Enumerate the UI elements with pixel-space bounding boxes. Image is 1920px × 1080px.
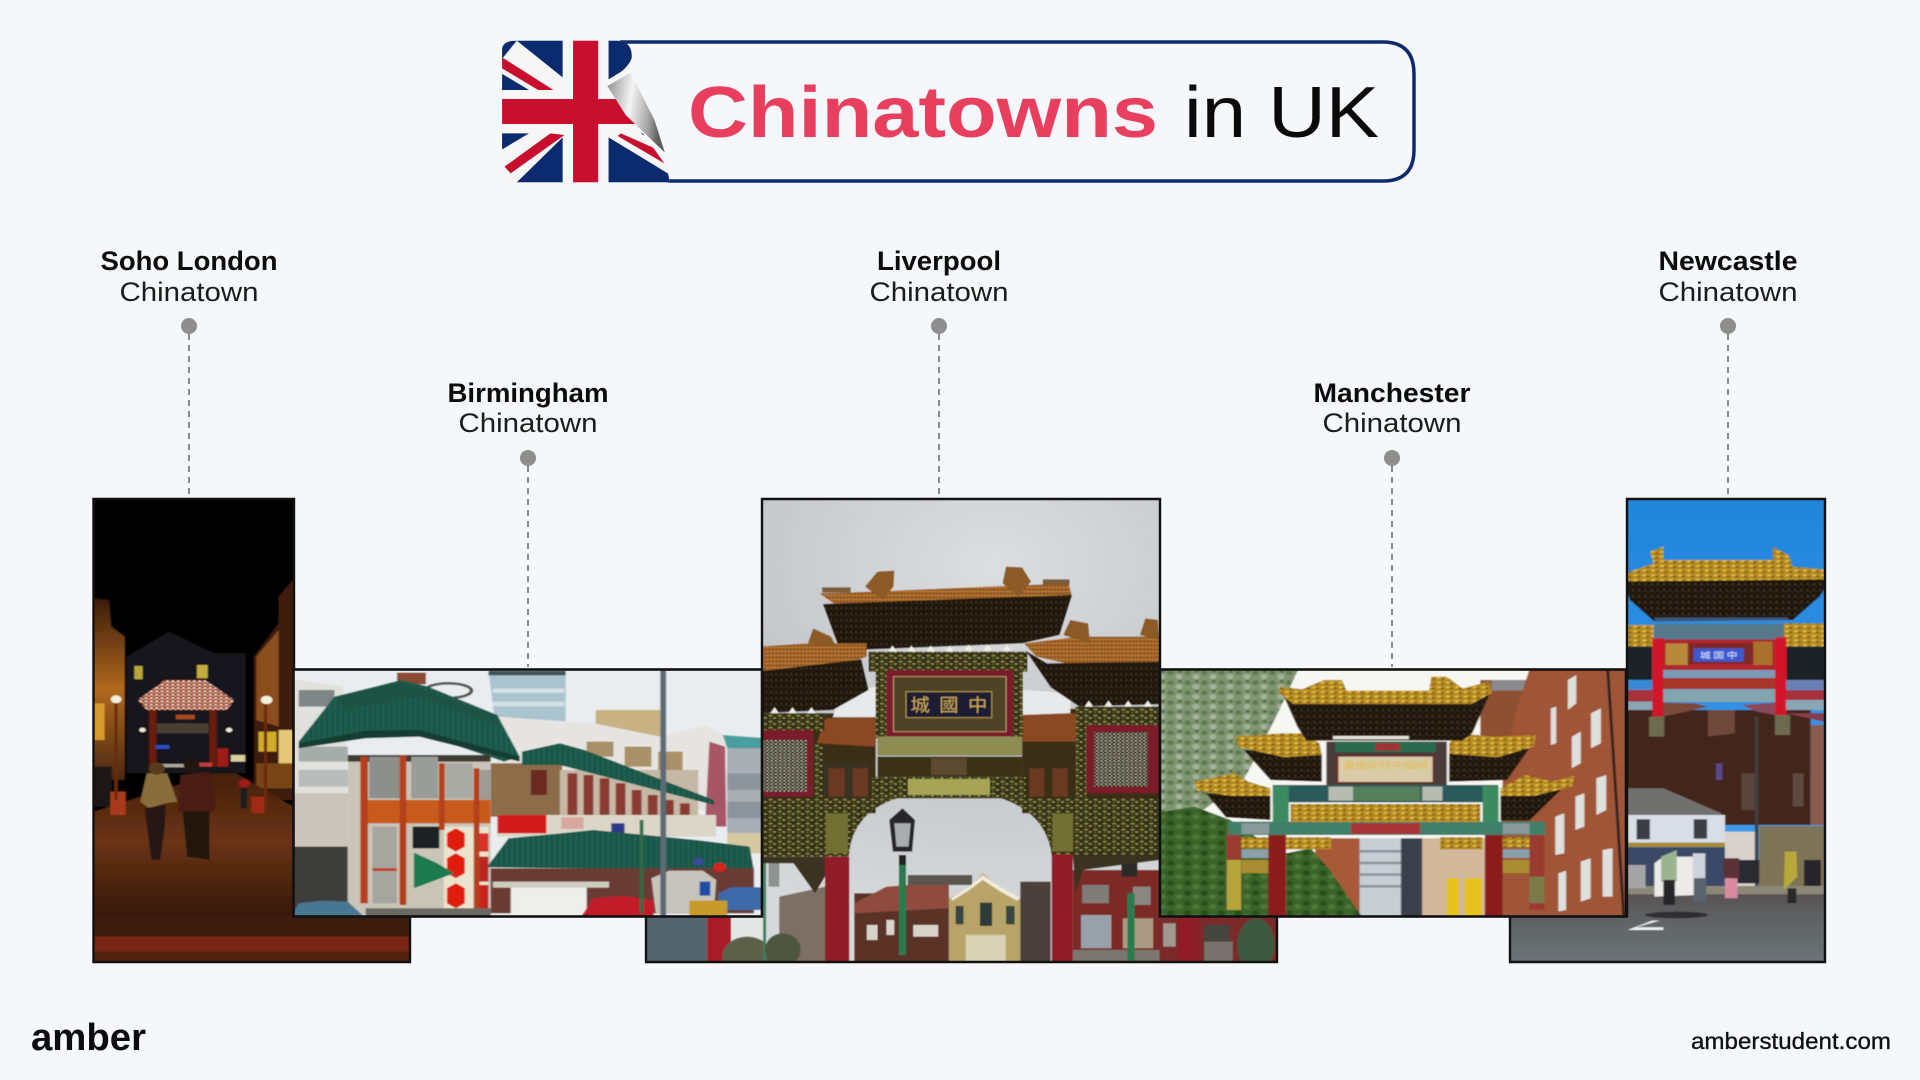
label: Soho London: Soho London: [100, 246, 278, 276]
title text: Chinatowns: Chinatowns: [688, 73, 1158, 153]
label: Birmingham: Chinatown: [458, 408, 598, 438]
Manchester plaque characters: 曼徹斯特中國城: [1343, 758, 1428, 772]
label: Newcastle: Newcastle: [1658, 246, 1798, 276]
label: Liverpool: Liverpool: [877, 246, 1001, 276]
label: Soho London: Chinatown: [120, 277, 258, 307]
label: Birmingham: [448, 378, 608, 667]
plaque characters Newcastle: 城 国 中: [1700, 649, 1737, 661]
photo: Liverpool arch: [640, 493, 1283, 977]
label: Manchester: Chinatown: [1322, 408, 1462, 438]
label: Liverpool: [870, 246, 1008, 496]
photo: Newcastle arch: [1503, 493, 1833, 967]
photo: Manchester arch: [1154, 667, 1632, 920]
logo: amber: amber: [31, 1017, 146, 1059]
photo: Soho London night street: [89, 495, 419, 967]
label: Manchester: [1314, 378, 1471, 667]
title text: in UK: in UK: [1184, 73, 1379, 153]
label: Newcastle: [1658, 246, 1798, 496]
label: Newcastle: Chinatown: [1658, 277, 1798, 307]
icon: union jack flag with curled corner: [498, 38, 676, 185]
photo: Birmingham Chinese quarter building: [288, 667, 767, 920]
arch plaque characters: 城 國 中: [911, 691, 987, 717]
label: Liverpool: Chinatown: [870, 277, 1008, 307]
label: Manchester: Manchester: [1314, 378, 1471, 408]
label: Soho London: [100, 246, 278, 496]
title banner: [498, 38, 1414, 185]
website url: amberstudent.com: [1691, 1028, 1891, 1054]
label: Birmingham: Birmingham: [448, 378, 608, 408]
banner outline: [620, 42, 1414, 181]
